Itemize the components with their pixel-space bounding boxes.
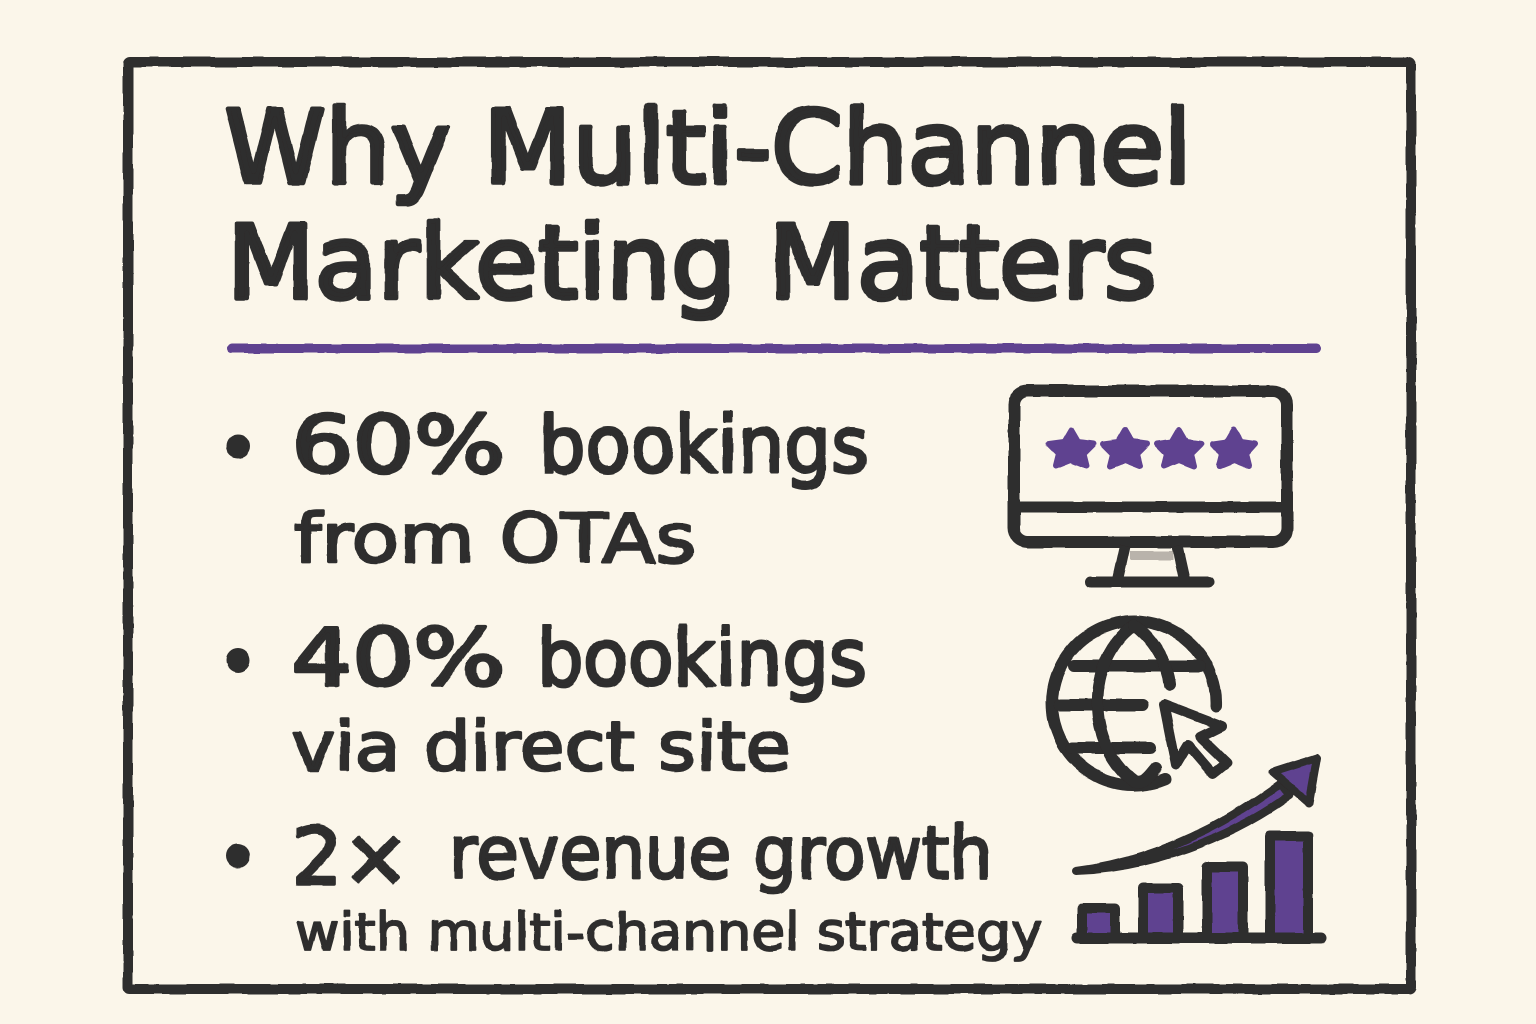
stat: 2x revenue growth with multi-channel strategy: revenue growth (449, 811, 993, 895)
title: Why Multi-Channel (224, 89, 1192, 208)
panel: outer frame (128, 62, 1411, 989)
icon: monitor with four stars (1014, 391, 1287, 582)
purple title divider (227, 344, 1321, 353)
stat: 40% bookings via direct site: bookings (537, 614, 867, 704)
stat: 60% bookings from OTAs (226, 401, 869, 579)
icon: globe with cursor (1052, 621, 1227, 785)
title (224, 89, 1192, 323)
stat: 2x revenue growth with multi-channel strategy (226, 811, 1043, 963)
stat: 2x revenue growth with multi-channel strategy: with multi-channel strategy (295, 903, 1043, 963)
icon: growth arrow (1076, 758, 1317, 871)
stat: 40% bookings via direct site: via direct site (291, 708, 791, 787)
bar chart: rising revenue (1077, 836, 1321, 938)
stat: 40% bookings via direct site: 40% (291, 614, 505, 704)
stat: 60% bookings from OTAs: bookings (539, 401, 869, 491)
stat: 60% bookings from OTAs: 60% (292, 401, 505, 491)
stat: 2x revenue growth with multi-channel strategy: 2× (292, 813, 409, 903)
title: Marketing Matters (227, 204, 1157, 323)
stat: 60% bookings from OTAs: from OTAs (294, 500, 696, 579)
stat: 40% bookings via direct site (226, 614, 867, 787)
